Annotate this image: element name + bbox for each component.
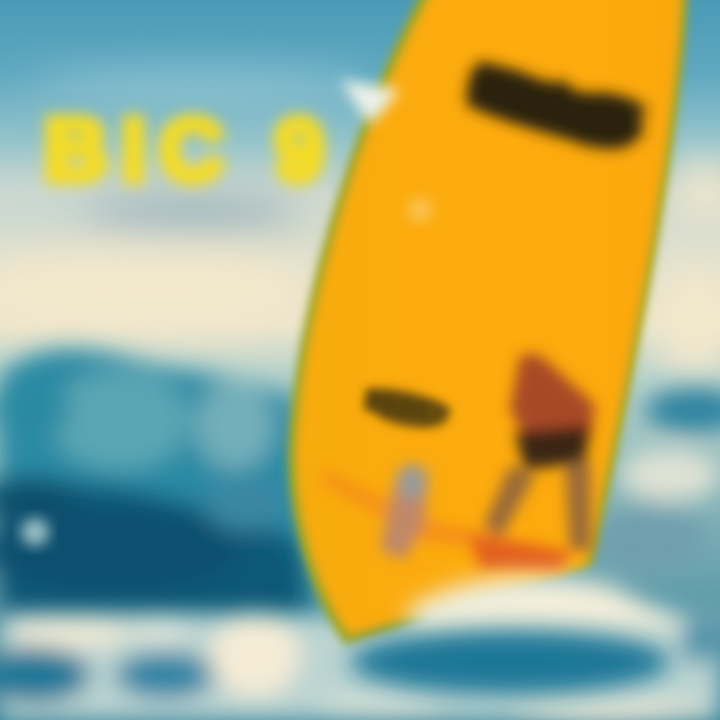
surfer arm and line bbox=[322, 470, 560, 562]
board logo: lower: BIC bbox=[359, 380, 452, 434]
board outline glow bbox=[288, 0, 688, 645]
surfer torso bbox=[510, 355, 595, 445]
foam over board tail bbox=[405, 576, 690, 640]
surfer bbox=[322, 355, 595, 572]
board highlight bbox=[408, 198, 432, 222]
surfer shorts bbox=[515, 425, 590, 470]
board logo: top: BIC bbox=[459, 47, 658, 154]
second figure bbox=[380, 470, 428, 560]
foreground water bbox=[350, 630, 670, 694]
main wave bbox=[0, 349, 320, 640]
headline text: BIC 9 bbox=[44, 100, 324, 199]
right-side waves bbox=[595, 388, 720, 574]
surfer legs bbox=[484, 465, 535, 540]
spray dot bbox=[21, 518, 49, 546]
leash bbox=[470, 535, 570, 572]
sun glint bbox=[340, 80, 400, 125]
board body bbox=[296, 0, 682, 636]
board logo: top bbox=[459, 47, 658, 154]
surfboard bbox=[288, 0, 688, 645]
board logo: lower bbox=[359, 380, 452, 434]
foam foreground bbox=[0, 613, 720, 720]
clouds bbox=[0, 73, 720, 380]
